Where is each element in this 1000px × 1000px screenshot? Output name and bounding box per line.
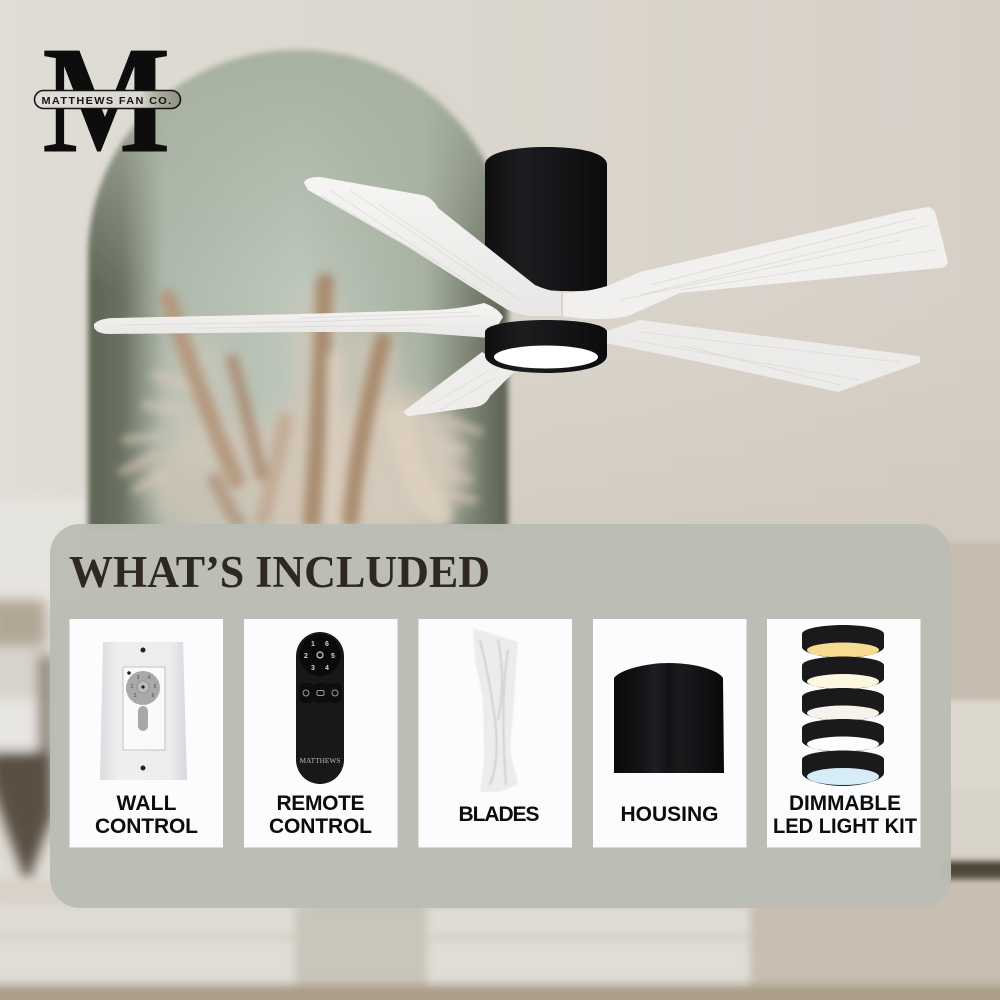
blade: lower front (404, 352, 514, 416)
panel: what's included (50, 524, 951, 908)
icon: remote: 5 (331, 653, 335, 660)
icon: wall control (100, 642, 187, 780)
icon: remote: 2 (304, 653, 308, 660)
card: blades: BLADES (458, 803, 540, 826)
blade: left (94, 303, 503, 338)
icon: wall control: 1 (134, 693, 137, 699)
icon: wall control: 5 (154, 684, 157, 690)
icon: blade (473, 628, 518, 792)
blade wood grain (120, 190, 935, 410)
right sofa (940, 500, 1000, 882)
card: remote control: CONTROL (269, 815, 372, 838)
card: remote control: REMOTE (276, 792, 364, 815)
icon: wall control: 4 (148, 675, 151, 681)
heading: WHAT’S INCLUDED (69, 547, 490, 597)
icon: remote: 4 (325, 665, 329, 672)
icon: housing cylinder (614, 663, 724, 773)
card: LED light kit: LED LIGHT KIT (773, 815, 917, 838)
card: housing: HOUSING (620, 803, 718, 826)
card: remote control (244, 619, 398, 848)
card: housing (593, 619, 746, 848)
left sofa and pillows (0, 600, 52, 885)
icon: remote (296, 632, 344, 784)
icon: LED light stack (802, 625, 884, 786)
blade: right (563, 207, 948, 319)
icon: remote: MATTHEWS (300, 756, 340, 765)
light kit body (485, 320, 607, 373)
arched wall niche (88, 50, 508, 530)
ceiling fan (94, 147, 948, 416)
icon: wall control: 2 (131, 684, 134, 690)
blade: upper left (304, 177, 561, 316)
logo: Matthews Fan Co.: M (42, 15, 171, 185)
logo badge: MATTHEWS FAN CO. (42, 95, 172, 107)
card: wall control (70, 619, 223, 848)
icon: remote: 6 (325, 641, 329, 648)
icon: remote: 1 (311, 641, 315, 648)
card: wall control: WALL (116, 792, 177, 815)
icon: wall control: 6 (152, 693, 155, 699)
logo badge (34, 90, 180, 108)
card: LED light kit: DIMMABLE (789, 792, 901, 815)
floor and rug (0, 880, 1000, 1000)
card: blades (418, 619, 572, 848)
icon: remote: 3 (311, 665, 315, 672)
blade: lower right (606, 320, 920, 392)
card: wall control: CONTROL (95, 815, 198, 838)
pampas grass (122, 282, 480, 550)
icon: wall control: 3 (137, 675, 140, 681)
card: LED light kit (767, 619, 920, 848)
fan housing (485, 147, 607, 291)
